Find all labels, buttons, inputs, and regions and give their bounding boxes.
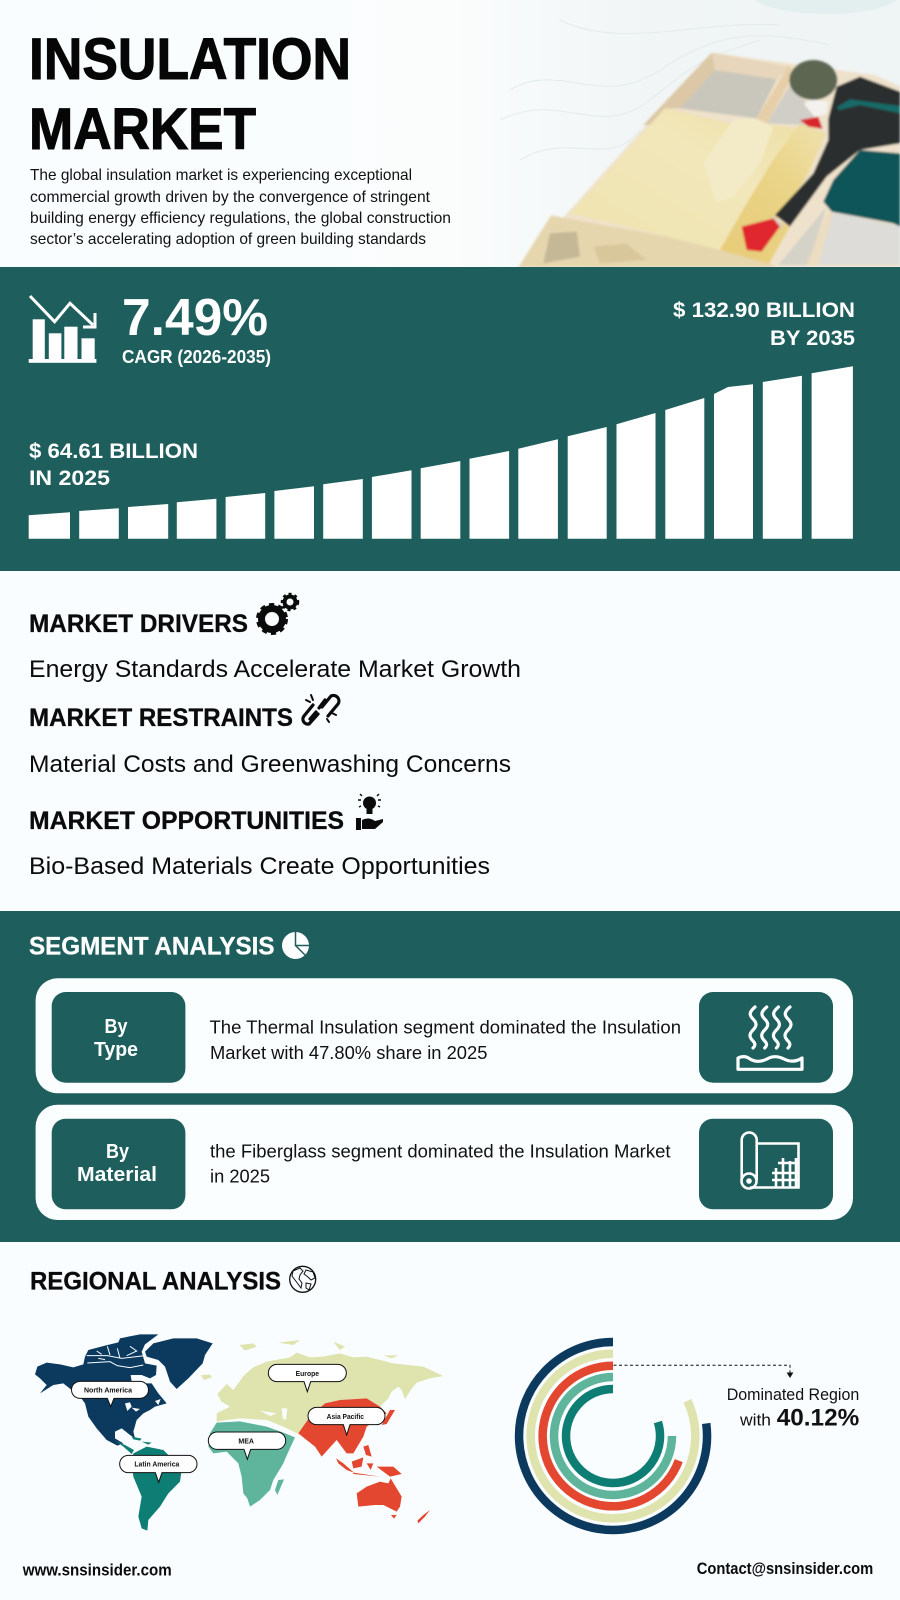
label box: by material: By <box>106 1141 130 1163</box>
icon: globe <box>290 1266 316 1292</box>
region: europe <box>201 1340 443 1434</box>
heading: market opportunities: MARKET OPPORTUNITIES <box>29 807 344 835</box>
title: INSULATION <box>29 27 351 92</box>
title: MARKET <box>29 97 256 162</box>
label box: by material: Material <box>77 1164 157 1186</box>
footer: website: www.snsinsider.com <box>22 1562 172 1580</box>
radial bar chart <box>519 1342 707 1530</box>
callout: dominated region share: 40.12% <box>777 1405 859 1432</box>
2025 value <box>29 439 198 490</box>
heading: regional analysis: REGIONAL ANALYSIS <box>30 1268 281 1296</box>
callout: europe: Europe <box>296 1371 319 1378</box>
intro paragraph: sector’s accelerating adoption of green building standards <box>30 231 426 248</box>
callout: north america: North America <box>84 1387 132 1394</box>
label box: by type <box>52 992 185 1083</box>
2035 value: $ 132.90 BILLION <box>673 298 855 322</box>
callout: dominated region share: with <box>739 1411 771 1430</box>
description: fiberglass <box>210 1141 670 1187</box>
decorative disc <box>752 0 900 14</box>
icon: gears <box>258 594 298 633</box>
card: by type <box>36 978 853 1093</box>
label box: by material <box>52 1119 185 1209</box>
band background <box>0 911 900 1242</box>
driver text: Energy Standards Accelerate Market Growth <box>29 656 521 683</box>
description: fiberglass: the Fiberglass segment dominated the Insulation Market <box>210 1141 670 1161</box>
2035 value: BY 2035 <box>770 326 855 350</box>
callout: asia pacific: Asia Pacific <box>327 1414 364 1421</box>
band background <box>0 267 900 571</box>
callout: asia pacific <box>308 1407 385 1435</box>
dashed leader arrow <box>614 1365 792 1377</box>
header background wash <box>0 0 900 267</box>
icon box: insulation roll <box>699 1119 833 1209</box>
title <box>29 27 351 162</box>
decorative wave lines <box>500 20 830 160</box>
bar chart: growth 2025 to 2035 <box>29 366 853 539</box>
region: north america <box>35 1334 213 1446</box>
heading: segment analysis: SEGMENT ANALYSIS <box>29 932 274 960</box>
callout: europe <box>268 1364 346 1392</box>
heading: market drivers: MARKET DRIVERS <box>29 610 248 638</box>
label box: by type: Type <box>94 1039 138 1061</box>
icon: pie chart <box>282 932 309 959</box>
description: thermal insulation <box>210 1018 681 1063</box>
callout: dominated region share <box>727 1385 859 1432</box>
world map <box>35 1334 443 1531</box>
icon: broken chain <box>303 695 339 724</box>
panel: regional analysis <box>30 1266 859 1531</box>
region: middle east and africa <box>208 1421 295 1507</box>
2035 value <box>673 298 855 350</box>
label box: by type: By <box>104 1016 128 1038</box>
intro paragraph <box>30 167 451 248</box>
icon: hand with light bulb <box>356 794 383 830</box>
intro paragraph: commercial growth driven by the convergence of stringent <box>30 189 431 206</box>
2025 value: $ 64.61 BILLION <box>29 439 198 463</box>
region: latin america <box>115 1437 182 1531</box>
intro paragraph: The global insulation market is experiencing exceptional <box>30 167 412 184</box>
description: thermal insulation: Market with 47.80% share in 2025 <box>210 1043 487 1063</box>
callout: latin america: Latin America <box>134 1462 179 1469</box>
region: asia pacific <box>298 1398 430 1523</box>
callout: latin america <box>120 1455 197 1482</box>
callout: north america <box>71 1381 148 1407</box>
photo: worker laying insulation <box>518 53 900 267</box>
description: thermal insulation: The Thermal Insulation segment dominated the Insulation <box>210 1018 681 1038</box>
opportunity text: Bio-Based Materials Create Opportunities <box>29 853 490 880</box>
panel: market dynamics <box>29 594 521 880</box>
restraint text: Material Costs and Greenwashing Concerns <box>29 751 511 778</box>
callout: mea: MEA <box>238 1438 254 1445</box>
heading: market restraints: MARKET RESTRAINTS <box>29 704 293 732</box>
callout: mea <box>208 1432 286 1459</box>
callout: dominated region share: Dominated Region <box>727 1385 859 1404</box>
icon box: heat waves <box>699 992 833 1083</box>
panel: market size <box>0 267 900 571</box>
icon: chart with falling arrow <box>29 296 96 363</box>
CAGR figure: CAGR (2026-2035) <box>122 347 271 367</box>
CAGR figure: 7.49% <box>122 289 268 347</box>
2025 value: IN 2025 <box>29 466 110 490</box>
description: fiberglass: in 2025 <box>210 1167 270 1187</box>
panel: header <box>0 0 900 267</box>
panel: segment analysis <box>0 911 900 1242</box>
card: by material <box>36 1105 853 1220</box>
footer: contact email: Contact@snsinsider.com <box>697 1560 873 1578</box>
intro paragraph: building energy efficiency regulations, the global construction <box>30 210 451 227</box>
